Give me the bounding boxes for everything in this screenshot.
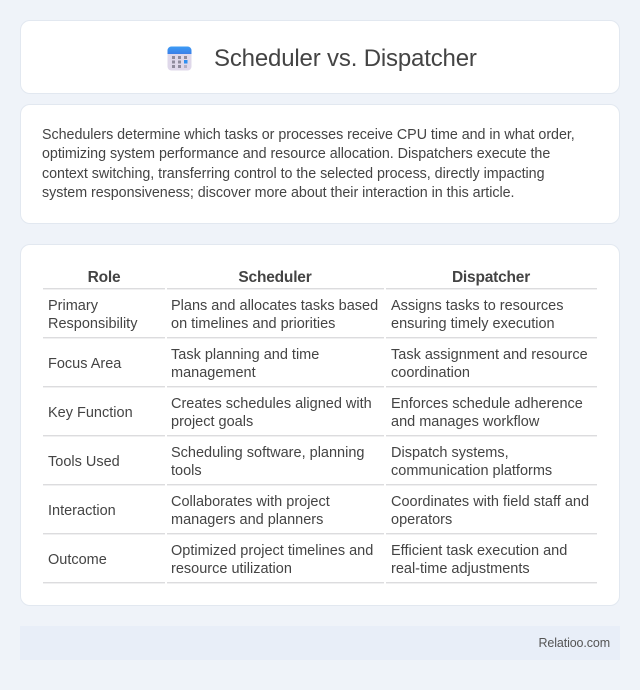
row: interaction: operators — [391, 512, 452, 528]
table header — [88, 269, 530, 286]
row: primary responsibility: Responsibility — [48, 316, 137, 332]
intro text: Schedulers determine which tasks or processes receive CPU time and in what order, — [42, 126, 575, 142]
row: focus area — [48, 347, 588, 381]
row: focus area: coordination — [391, 365, 470, 381]
row: tools used: Scheduling software, planning — [171, 445, 364, 461]
row: outcome — [48, 543, 567, 577]
footer credit: Relatioo.com — [538, 636, 610, 650]
row: outcome: real-time adjustments — [391, 561, 530, 577]
row: interaction: managers and planners — [171, 512, 323, 528]
panel: introduction — [20, 104, 620, 224]
row: primary responsibility: Assigns tasks to resources — [391, 298, 563, 314]
row: tools used: Tools Used — [48, 454, 120, 470]
row: focus area: Task assignment and resource — [391, 347, 588, 363]
row: interaction — [48, 494, 589, 528]
row: outcome: Optimized project timelines and — [171, 543, 373, 559]
row: tools used: communication platforms — [391, 463, 552, 479]
row: interaction: Coordinates with field staff and — [391, 494, 589, 510]
panel: comparison table — [20, 244, 620, 606]
row: primary responsibility: Primary — [48, 298, 98, 314]
table header: Dispatcher — [452, 269, 530, 286]
row: outcome: Outcome — [48, 552, 107, 568]
row: outcome: Efficient task execution and — [391, 543, 567, 559]
title: Scheduler vs. Dispatcher — [214, 45, 477, 72]
table header: Scheduler — [238, 269, 312, 286]
footer bar — [20, 626, 620, 660]
row: primary responsibility: ensuring timely execution — [391, 316, 555, 332]
row: tools used — [48, 445, 552, 479]
row: key function — [48, 396, 583, 430]
row: key function: Enforces schedule adherence — [391, 396, 583, 412]
panel: title card — [20, 20, 620, 94]
icon: calendar — [168, 46, 192, 70]
row: primary responsibility: Plans and allocates tasks based — [171, 298, 378, 314]
row: interaction: Collaborates with project — [171, 494, 330, 510]
intro text: system responsiveness; discover more about their interaction in this article. — [42, 185, 514, 201]
intro text — [42, 126, 575, 201]
row: outcome: resource utilization — [171, 561, 292, 577]
row: key function: Key Function — [48, 405, 133, 421]
row: tools used: Dispatch systems, — [391, 445, 509, 461]
row: tools used: tools — [171, 463, 202, 479]
intro text: context switching, transferring control to the selected process, directly impacting — [42, 166, 544, 182]
row: key function: Creates schedules aligned with — [171, 396, 372, 412]
row: focus area: management — [171, 365, 256, 381]
row: focus area: Focus Area — [48, 356, 121, 372]
table header: Role — [88, 269, 120, 286]
row: primary responsibility: on timelines and priorities — [171, 316, 335, 332]
row: interaction: Interaction — [48, 503, 116, 519]
intro text: optimizing system performance and resource allocation. Dispatchers execute the — [42, 146, 550, 162]
row: focus area: Task planning and time — [171, 347, 319, 363]
row: key function: project goals — [171, 414, 253, 430]
row: primary responsibility — [48, 298, 563, 332]
row: key function: and manages workflow — [391, 414, 539, 430]
